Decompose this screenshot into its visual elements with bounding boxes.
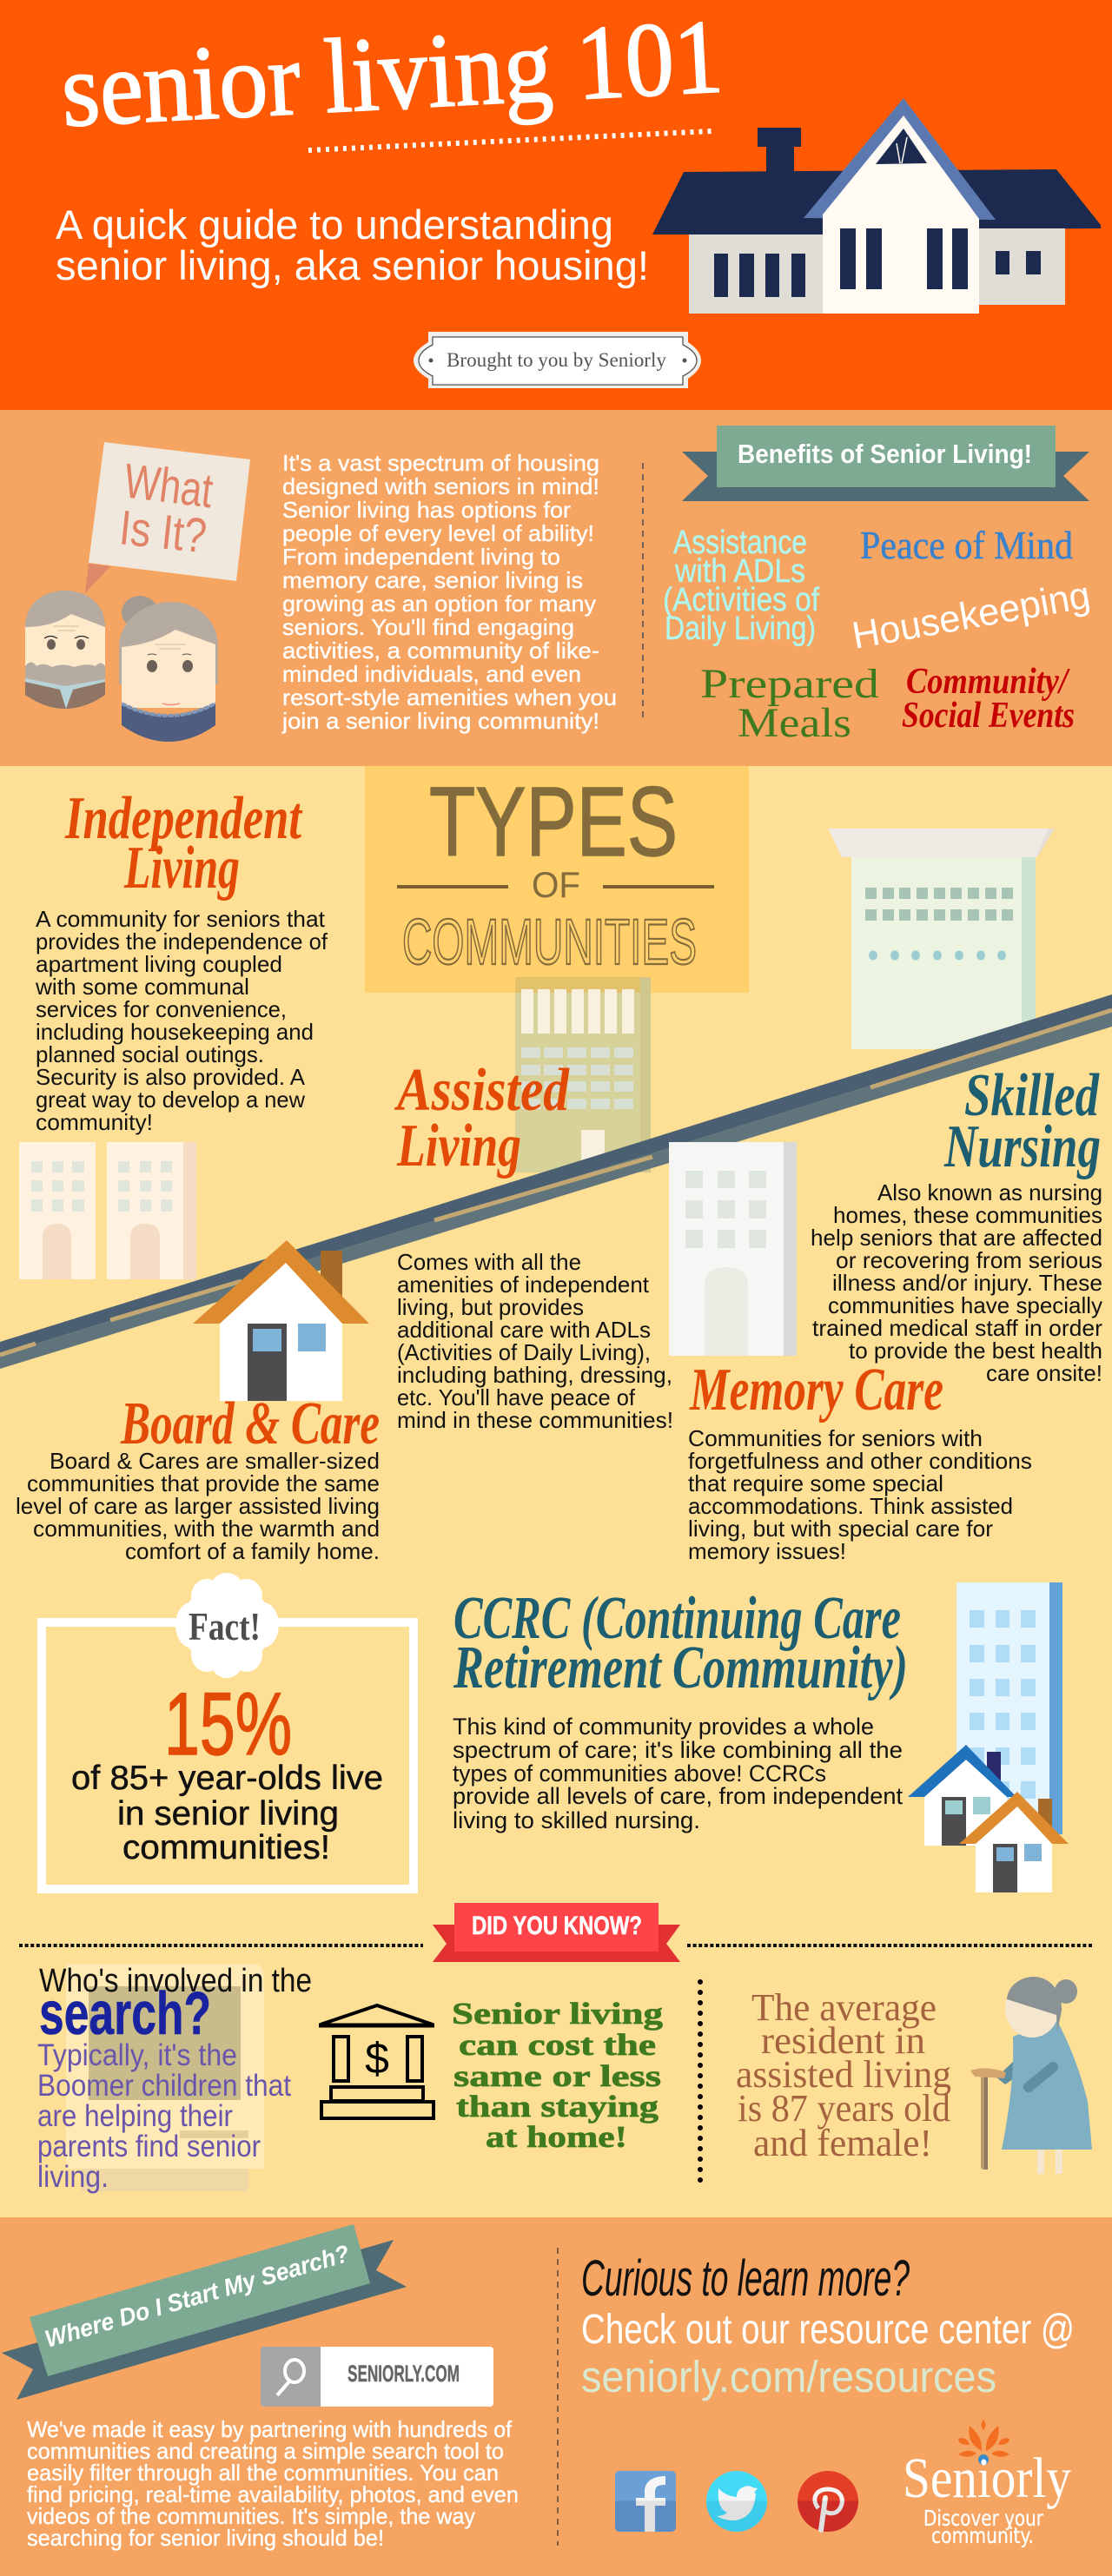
illustration: diagonal road: [0, 994, 1112, 1369]
heading: types of communities: TYPES: [429, 767, 678, 876]
text block: independent living: Security is also provided. A: [36, 1064, 306, 1090]
icon: fact cloud: [175, 1573, 279, 1678]
link: seniorly resources: seniorly.com/resources: [581, 2352, 996, 2401]
heading: assisted living: [394, 1057, 570, 1179]
benefit: community social events: [902, 662, 1075, 736]
subtitle: senior living, aka senior housing!: [56, 242, 649, 288]
icon: old man: [25, 591, 105, 721]
text block: what is it description: people of every level of ability!: [282, 520, 594, 546]
text block: search description: searching for senior living should be!: [27, 2525, 384, 2551]
text block: assisted living: living, but provides: [397, 1294, 584, 1320]
text block: assisted living: additional care with ADLs: [397, 1317, 651, 1343]
text block: independent living: services for convenience,: [36, 996, 287, 1022]
heading: CCRC: [453, 1585, 908, 1701]
text block: board and care: comfort of a family home.: [125, 1538, 380, 1564]
text block: skilled nursing: illness and/or injury. These: [832, 1270, 1102, 1296]
heading: types of communities: COMMUNITIES: [402, 906, 697, 978]
icon: pinterest: [798, 2471, 858, 2532]
banner: did you know: DID YOU KNOW?: [472, 1912, 642, 1940]
banner: did you know: [433, 1903, 680, 1962]
text block: what is it description: memory care, senior living is: [282, 567, 583, 593]
text block: assisted living: etc. You'll have peace of: [397, 1384, 636, 1410]
text block: search description: videos of the communities. It's simple, the way: [27, 2503, 475, 2529]
text block: CCRC: provide all levels of care, from independent: [453, 1783, 903, 1809]
text block: board and care: communities that provide the same: [27, 1470, 380, 1496]
illustration: CCRC tower and houses: [908, 1582, 1069, 1892]
search box: SENIORLY.COM: [348, 2361, 460, 2387]
panel: fact box: of 85+ year-olds live: [71, 1760, 383, 1797]
search box: [261, 2347, 493, 2407]
text block: average resident: The average: [751, 1986, 937, 2029]
text block: CCRC: living to skilled nursing.: [453, 1807, 700, 1833]
benefit: peace of mind: Peace of Mind: [860, 523, 1073, 567]
text block: memory care: accommodations. Think assisted: [688, 1493, 1013, 1519]
subtitle: A quick guide to understanding: [56, 201, 613, 248]
text block: assisted living: Comes with all the: [397, 1249, 581, 1275]
text block: skilled nursing: help seniors that are affected: [811, 1225, 1102, 1251]
panel: fact box: 15%: [164, 1674, 292, 1773]
benefit: assistance with ADLs: with ADLs: [674, 553, 805, 590]
icon: house illustration: [652, 98, 1101, 314]
benefit: assistance with ADLs: Assistance: [673, 525, 807, 561]
text block: search description: [27, 2416, 519, 2551]
text block: who's involved: Who's involved in the: [39, 1963, 312, 1999]
benefit: assistance with ADLs: [663, 525, 819, 647]
benefit: assistance with ADLs: (Activities of: [663, 582, 819, 618]
benefit: prepared meals: [700, 661, 879, 746]
text block: who's involved: parents find senior: [37, 2130, 261, 2163]
heading: board and care: Board & Care: [120, 1390, 380, 1457]
text block: assisted living: [397, 1249, 673, 1433]
text block: assisted living: mind in these communities!: [397, 1407, 673, 1433]
text block: search description: communities and creating a simple search tool to: [27, 2438, 504, 2464]
heading: CCRC: Retirement Community): [453, 1635, 908, 1701]
text block: what is it description: growing as an option for many: [282, 591, 596, 617]
heading: assisted living: Assisted: [394, 1057, 570, 1124]
text block: what is it description: join a senior living community!: [281, 708, 599, 734]
text block: skilled nursing: or recovering from serious: [836, 1247, 1102, 1273]
text block: skilled nursing: [811, 1179, 1102, 1386]
banner: where do I start my search: Where Do I Start My Search?: [42, 2240, 353, 2353]
text block: board and care: communities, with the warmth and: [33, 1516, 380, 1542]
text block: search description: easily filter through all the communities. You can: [27, 2460, 499, 2486]
text block: who's involved: are helping their: [37, 2099, 233, 2133]
text block: what is it description: It's a vast spectrum of housing: [282, 450, 599, 476]
text block: who's involved: [37, 1963, 312, 2194]
benefit: housekeeping: Housekeeping: [849, 573, 1094, 657]
text block: CCRC: types of communities above! CCRCs: [453, 1760, 826, 1787]
callout: what is it speech bubble: What: [122, 452, 216, 518]
text block: skilled nursing: to provide the best health: [849, 1338, 1102, 1364]
icon: facebook: [615, 2471, 676, 2532]
text block: memory care: living, but with special care for: [688, 1516, 993, 1542]
text block: what is it description: Senior living has options for: [282, 497, 571, 523]
text block: memory care: Communities for seniors with: [688, 1425, 983, 1451]
text block: independent living: including housekeeping and: [36, 1019, 314, 1045]
text block: skilled nursing: Also known as nursing: [877, 1179, 1102, 1205]
text block: memory care: memory issues!: [688, 1538, 846, 1564]
text block: independent living: community!: [36, 1109, 153, 1135]
callout: what is it speech bubble: Is It?: [117, 499, 209, 563]
text block: senior living cost: Senior living: [452, 1997, 664, 2031]
heading: skilled nursing: [943, 1062, 1101, 1180]
text block: search description: We've made it easy by partnering with hundreds of: [27, 2416, 513, 2442]
text block: what is it description: From independent living to: [282, 544, 560, 570]
illustration: assisted living building: [515, 977, 651, 1172]
banner: benefits of senior living: [682, 426, 1089, 501]
panel: header background: [0, 0, 1112, 410]
heading: independent living: [64, 785, 303, 902]
text block: assisted living: including bathing, dressing,: [397, 1362, 672, 1388]
logo: seniorly: [903, 2420, 1071, 2548]
text block: board and care: [16, 1448, 380, 1564]
benefit: community social events: Social Events: [902, 696, 1075, 736]
text block: CCRC: This kind of community provides a whole: [453, 1714, 874, 1740]
icon: bank building with dollar: $: [365, 2034, 389, 2083]
dotted title underline: [308, 131, 712, 150]
panel: types of communities background: [0, 766, 1112, 2217]
benefit: prepared meals: Prepared: [700, 661, 879, 707]
benefit: community social events: Community/: [906, 662, 1070, 702]
text block: who's involved: Boomer children that: [37, 2069, 291, 2103]
text block: independent living: with some communal: [35, 974, 249, 1000]
heading: memory care: Memory Care: [689, 1357, 943, 1423]
heading: assisted living: Living: [396, 1113, 521, 1179]
text block: who's involved: search?: [39, 1979, 211, 2047]
text block: average resident: resident in: [761, 2019, 925, 2062]
badge: brought to you by: Brought to you by Seniorly: [447, 349, 666, 371]
text block: independent living: apartment living coupled: [36, 951, 282, 977]
text block: CCRC: spectrum of care; it's like combining all the: [453, 1737, 903, 1763]
text block: skilled nursing: homes, these communities: [833, 1202, 1102, 1228]
callout: who's involved backdrop: [66, 1964, 264, 2191]
text block: assisted living: amenities of independent: [397, 1271, 650, 1298]
illustration: board and care house: [193, 1240, 369, 1401]
text block: independent living: great way to develop a new: [36, 1087, 305, 1113]
text block: skilled nursing: care onsite!: [986, 1360, 1102, 1386]
illustration: memory care tower: [828, 829, 1055, 1049]
text block: memory care: that require some special: [688, 1470, 943, 1496]
text block: what is it description: activities, a community of like-: [282, 637, 599, 664]
text block: skilled nursing: trained medical staff in order: [812, 1315, 1102, 1341]
text block: independent living: A community for seniors that: [36, 906, 326, 932]
text block: who's involved: Typically, it's the: [37, 2038, 237, 2072]
text block: average resident: and female!: [753, 2122, 932, 2164]
text block: senior living cost: than staying: [456, 2090, 659, 2124]
heading: curious to learn more: Curious to learn more?: [581, 2250, 910, 2307]
text block: average resident: assisted living: [736, 2053, 951, 2096]
heading: types of communities: OF: [532, 864, 580, 905]
text block: senior living cost: same or less: [453, 2059, 661, 2093]
heading: CCRC: CCRC (Continuing Care: [453, 1585, 901, 1652]
panel: fact box: Fact!: [189, 1604, 261, 1648]
text block: what is it description: designed with seniors in mind!: [282, 473, 599, 499]
text block: CCRC: [453, 1714, 903, 1833]
text block: what is it description: seniors. You'll find engaging: [282, 614, 574, 640]
text block: what is it description: minded individuals, and even: [282, 661, 581, 687]
callout: what is it speech bubble: [85, 442, 250, 593]
logo: seniorly: Discover your: [923, 2506, 1044, 2531]
heading: independent living: Independent: [64, 785, 303, 852]
banner: where do I start my search: [2, 2224, 407, 2400]
text block: senior living cost: at home!: [486, 2120, 627, 2154]
text block: board and care: Board & Cares are smaller-sized: [50, 1448, 380, 1474]
text block: senior living cost: can cost the: [459, 2028, 656, 2062]
panel: fact box: in senior living: [117, 1795, 339, 1833]
illustration: independent living buildings: [19, 1142, 196, 1279]
benefit: prepared meals: Meals: [738, 700, 851, 746]
text block: assisted living: (Activities of Daily Living),: [397, 1339, 651, 1365]
subtitle: [56, 201, 649, 288]
text block: average resident: [736, 1986, 951, 2164]
icon: twitter: [706, 2471, 767, 2532]
icon: bank building with dollar: [319, 2005, 434, 2118]
panel: what is it background: [0, 410, 1112, 766]
text block: what is it description: [281, 450, 617, 734]
logo: seniorly: community.: [931, 2523, 1034, 2548]
benefit: assistance with ADLs: Daily Living): [665, 611, 816, 647]
heading: types of communities: [365, 766, 749, 993]
panel: fact box: communities!: [122, 1829, 330, 1866]
text block: memory care: [688, 1425, 1032, 1564]
text block: who's involved: living.: [37, 2160, 109, 2194]
text block: board and care: level of care as larger assisted living: [16, 1493, 380, 1519]
text block: search description: find pricing, real-time availability, photos, and even: [27, 2481, 519, 2507]
text block: skilled nursing: communities have specially: [828, 1292, 1102, 1318]
text block: memory care: forgetfulness and other conditions: [688, 1448, 1032, 1474]
logo: seniorly: Seniorly: [903, 2447, 1071, 2510]
text block: independent living: provides the independence of: [36, 928, 328, 954]
text block: independent living: planned social outings.: [36, 1041, 264, 1067]
panel: fact box: [42, 1573, 414, 1889]
illustration: skilled nursing building: [669, 1142, 797, 1356]
banner: benefits of senior living: Benefits of Senior Living!: [738, 439, 1032, 469]
text block: independent living: [35, 906, 328, 1135]
icon: elderly woman with cane: [970, 1977, 1092, 2174]
text block: average resident: is 87 years old: [738, 2087, 950, 2130]
text block: what is it description: resort-style amenities when you: [282, 684, 617, 710]
icon: old woman: [119, 596, 218, 747]
badge: brought to you by: [414, 332, 701, 388]
text block: senior living cost: [452, 1997, 664, 2154]
panel: where to start background: [0, 2217, 1112, 2576]
heading: independent living: Living: [123, 835, 240, 902]
